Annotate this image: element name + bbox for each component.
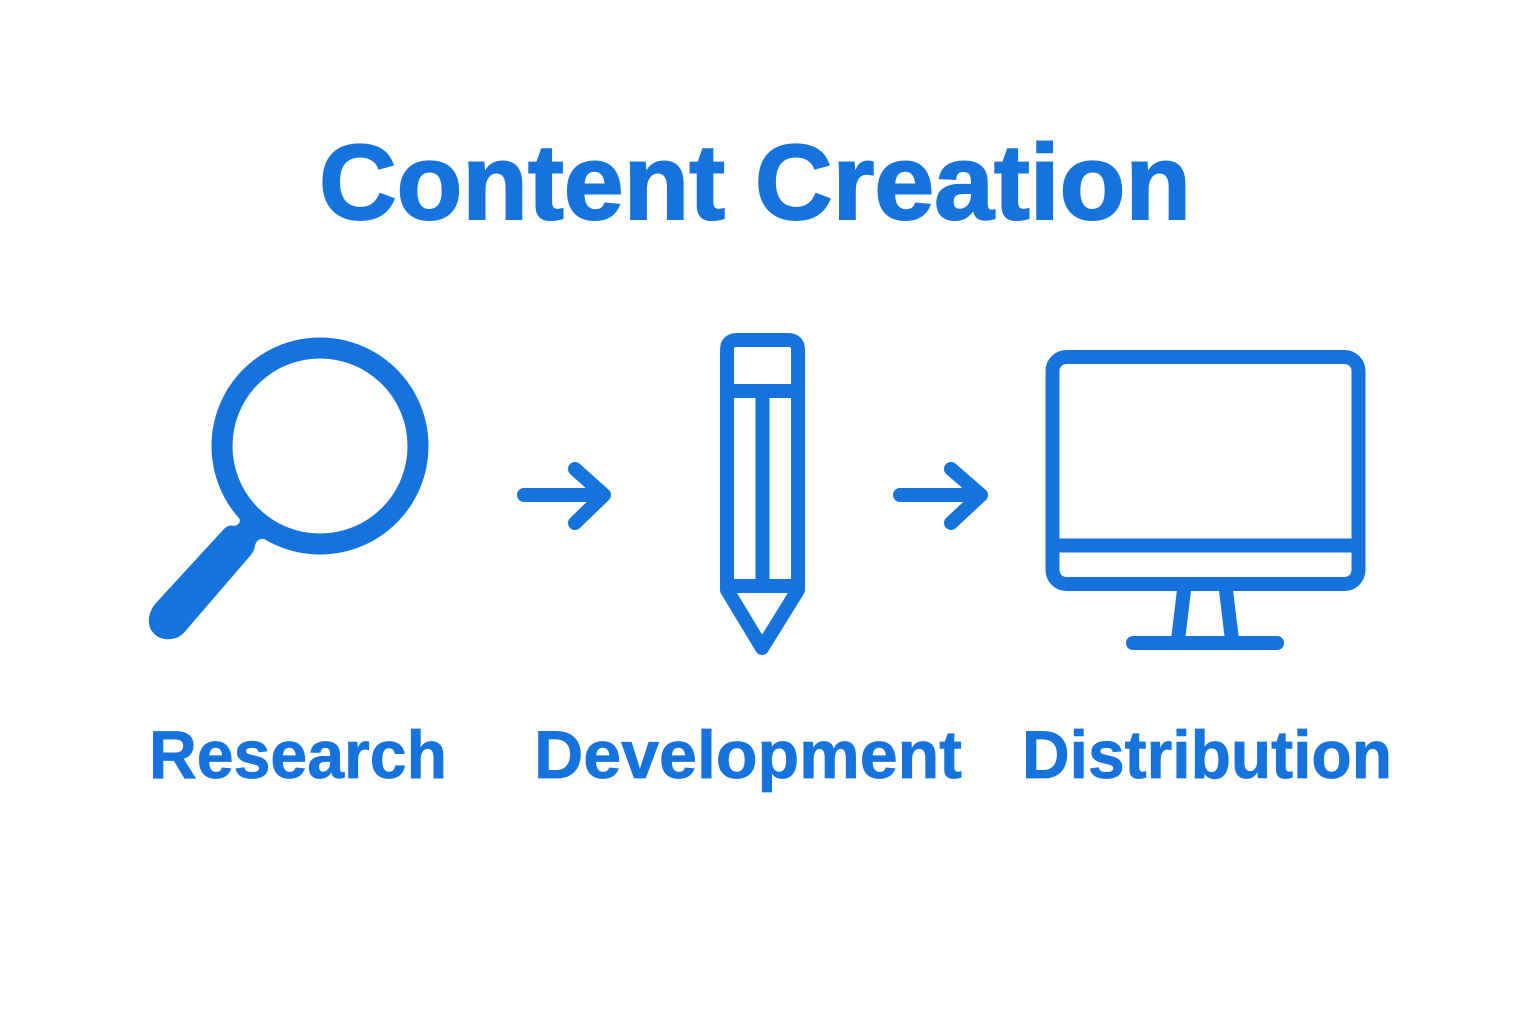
- label: development: Development: [534, 717, 962, 793]
- label: distribution: Distribution: [1022, 717, 1392, 793]
- title: Content Creation: [319, 122, 1191, 242]
- arrow: research to development: [524, 469, 604, 523]
- arrow: development to distribution: [900, 469, 981, 523]
- label: research: Research: [149, 717, 447, 793]
- icon: pencil: [727, 340, 798, 648]
- icon: computer monitor: [1052, 357, 1358, 643]
- icon: magnifying glass: [149, 348, 418, 639]
